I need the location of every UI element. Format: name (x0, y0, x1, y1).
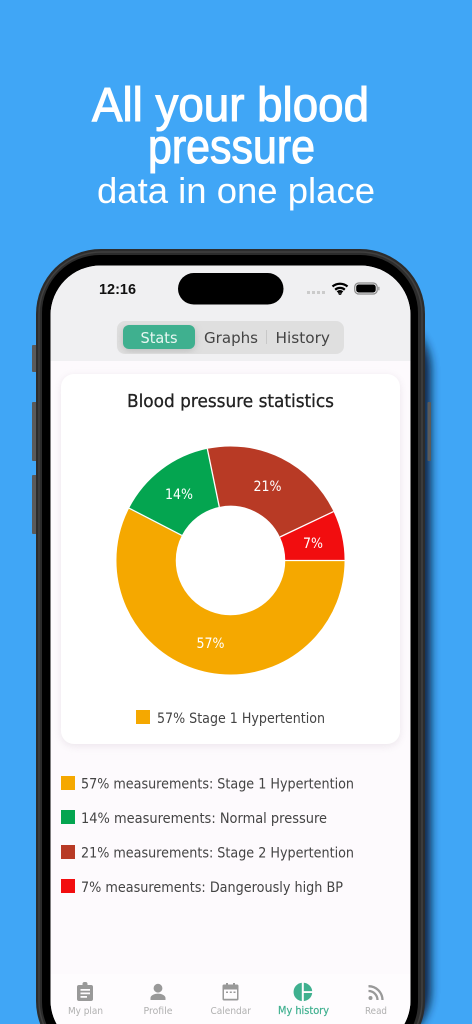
nav: calendar (210, 983, 252, 1017)
icon: battery (355, 283, 380, 294)
label: 21%: 21% (254, 479, 282, 495)
signal dots (307, 291, 325, 294)
headline line 1: All your blood (92, 79, 369, 132)
frame highlight (39, 252, 422, 1024)
nav: calendar: Calendar (210, 1006, 252, 1017)
row: normal: 14% measurements: Normal pressure (81, 811, 327, 827)
status time: 12:16 (99, 281, 136, 298)
tab divider (266, 330, 267, 344)
nav: profile (144, 984, 172, 1017)
header background (50, 265, 411, 361)
control track (117, 321, 344, 354)
phone bezel (42, 255, 418, 1024)
card heading: Blood pressure statistics (127, 391, 334, 412)
screen (50, 265, 411, 1024)
card body (61, 374, 400, 744)
nav: my history: My history (278, 1005, 329, 1017)
tab: stats: Stats (140, 329, 178, 347)
dynamic island (178, 273, 284, 304)
segmented control (117, 321, 344, 354)
bottom navigation (50, 982, 410, 1024)
slice: 14% (128, 448, 219, 536)
icon: rss (368, 986, 382, 1000)
panel: statistics card (61, 374, 400, 746)
tab: graphs: Graphs (204, 329, 258, 347)
slice: 21% (206, 446, 334, 537)
legend text: 57% Stage 1 Hypertention (157, 711, 325, 727)
chart legend (136, 710, 325, 727)
nav: my history (278, 983, 329, 1017)
nav: read: Read (365, 1006, 387, 1017)
slice: 7% (280, 510, 345, 560)
summary list (61, 776, 354, 896)
side buttons (32, 345, 431, 534)
legend swatch (136, 710, 150, 724)
tab: history: History (276, 329, 330, 347)
headline (92, 79, 375, 211)
row: stage 2: 21% measurements: Stage 2 Hypertention (81, 846, 354, 862)
headline line 3: data in one place (97, 170, 375, 211)
donut chart (117, 447, 346, 674)
screen background (50, 265, 411, 1024)
nav: read (365, 986, 387, 1017)
icon: wifi (332, 284, 348, 294)
active tab shadow (123, 327, 195, 351)
row: stage 1: 57% measurements: Stage 1 Hypertention (81, 776, 354, 792)
icon: clipboard (77, 982, 93, 1001)
phone frame (36, 249, 425, 1024)
nav background (50, 1000, 410, 1024)
row: dangerously high: 7% measurements: Dangerously high BP (81, 880, 343, 896)
label: 7%: 7% (303, 536, 323, 552)
nav: my plan (68, 982, 103, 1017)
slice: 57% (146, 476, 315, 645)
icon: person (150, 984, 166, 1000)
icon: pie chart (294, 983, 312, 1001)
phone mockup (32, 249, 431, 1024)
label: 14%: 14% (165, 487, 193, 503)
icon: calendar (222, 983, 238, 1000)
nav: my plan: My plan (68, 1006, 103, 1017)
phone shadow (60, 310, 431, 1024)
label: 57%: 57% (196, 636, 224, 652)
active tab (123, 325, 195, 349)
nav: profile: Profile (144, 1006, 172, 1017)
card shadow (61, 376, 400, 746)
headline line 2: pressure (148, 121, 315, 174)
